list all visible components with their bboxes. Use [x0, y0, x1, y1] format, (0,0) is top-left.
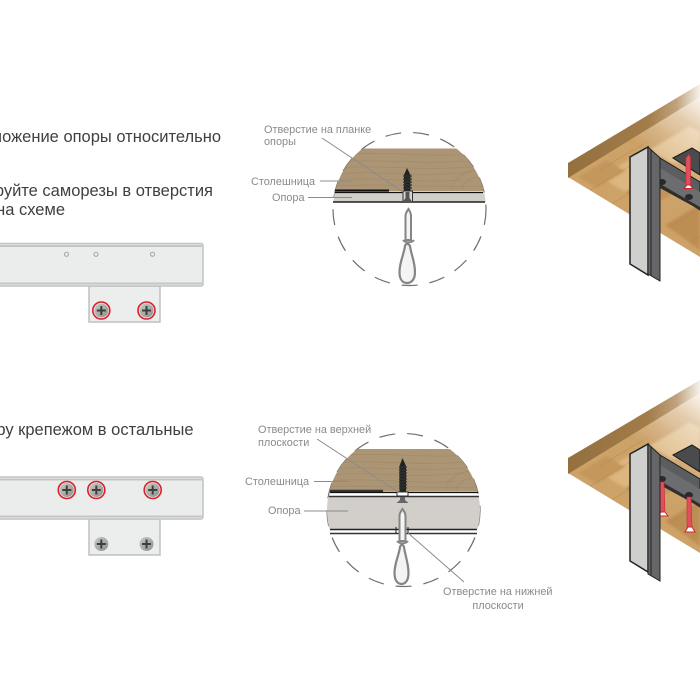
screw [396, 458, 408, 503]
label: lower hole [443, 586, 552, 612]
wood tabletop section [330, 148, 490, 202]
label: lower hole: Отверстие на нижней [443, 586, 552, 598]
red screw [658, 482, 668, 516]
bracket [660, 455, 700, 507]
back plate [673, 148, 700, 175]
label: support: Опора [268, 505, 301, 517]
back plate [673, 445, 700, 472]
diagram: support top with upper screws [0, 477, 203, 555]
label: upper hole: Отверстие на верхней [258, 424, 371, 436]
label: support: Опора [272, 192, 305, 204]
illustration: table corner 2 [560, 380, 700, 581]
screw [140, 537, 154, 551]
screw with red ring [58, 482, 75, 498]
wood underside [569, 393, 700, 553]
screwdriver [400, 209, 415, 283]
leg [630, 444, 648, 572]
label: upper hole: плоскости [258, 437, 309, 449]
illustration: table corner 1 [560, 84, 700, 281]
label: hole in plank: Отверстие на планке [264, 124, 371, 136]
diagram: section view 2 [245, 424, 552, 612]
leader: hole in plank [322, 138, 403, 192]
leader: upper hole [317, 439, 398, 492]
leader: lower hole [408, 533, 464, 582]
leg [630, 147, 648, 275]
leader: tabletop [314, 480, 348, 482]
screw with red ring [138, 302, 155, 319]
leader: tabletop [320, 180, 352, 182]
red screw [685, 497, 695, 532]
label: tabletop: Столешница [245, 476, 310, 488]
holes [64, 252, 154, 256]
label: lower hole: плоскости [472, 600, 524, 612]
dashed circle [327, 434, 480, 586]
diagram: support top with lower screws [0, 244, 203, 322]
wood edge [568, 84, 700, 178]
heading: step 1 line 2 [0, 182, 213, 219]
diagram: section view 1 [251, 124, 490, 286]
wood underside [569, 97, 700, 257]
leader: support [308, 196, 352, 198]
screw with red ring [93, 302, 110, 319]
screw with red ring [88, 482, 105, 498]
red screw [684, 154, 693, 188]
wood edge [568, 380, 700, 474]
label: upper hole [258, 424, 371, 449]
label: hole in plank [264, 124, 371, 148]
screw [402, 168, 413, 203]
leader: support [304, 510, 348, 512]
screwdriver [394, 509, 408, 584]
screw with red ring [144, 482, 161, 498]
label: tabletop: Столешница [251, 176, 316, 188]
dashed circle [333, 132, 486, 286]
screw [94, 537, 108, 551]
label: hole in plank: опоры [264, 136, 296, 148]
wood and support section [325, 449, 485, 529]
bracket [660, 158, 700, 210]
